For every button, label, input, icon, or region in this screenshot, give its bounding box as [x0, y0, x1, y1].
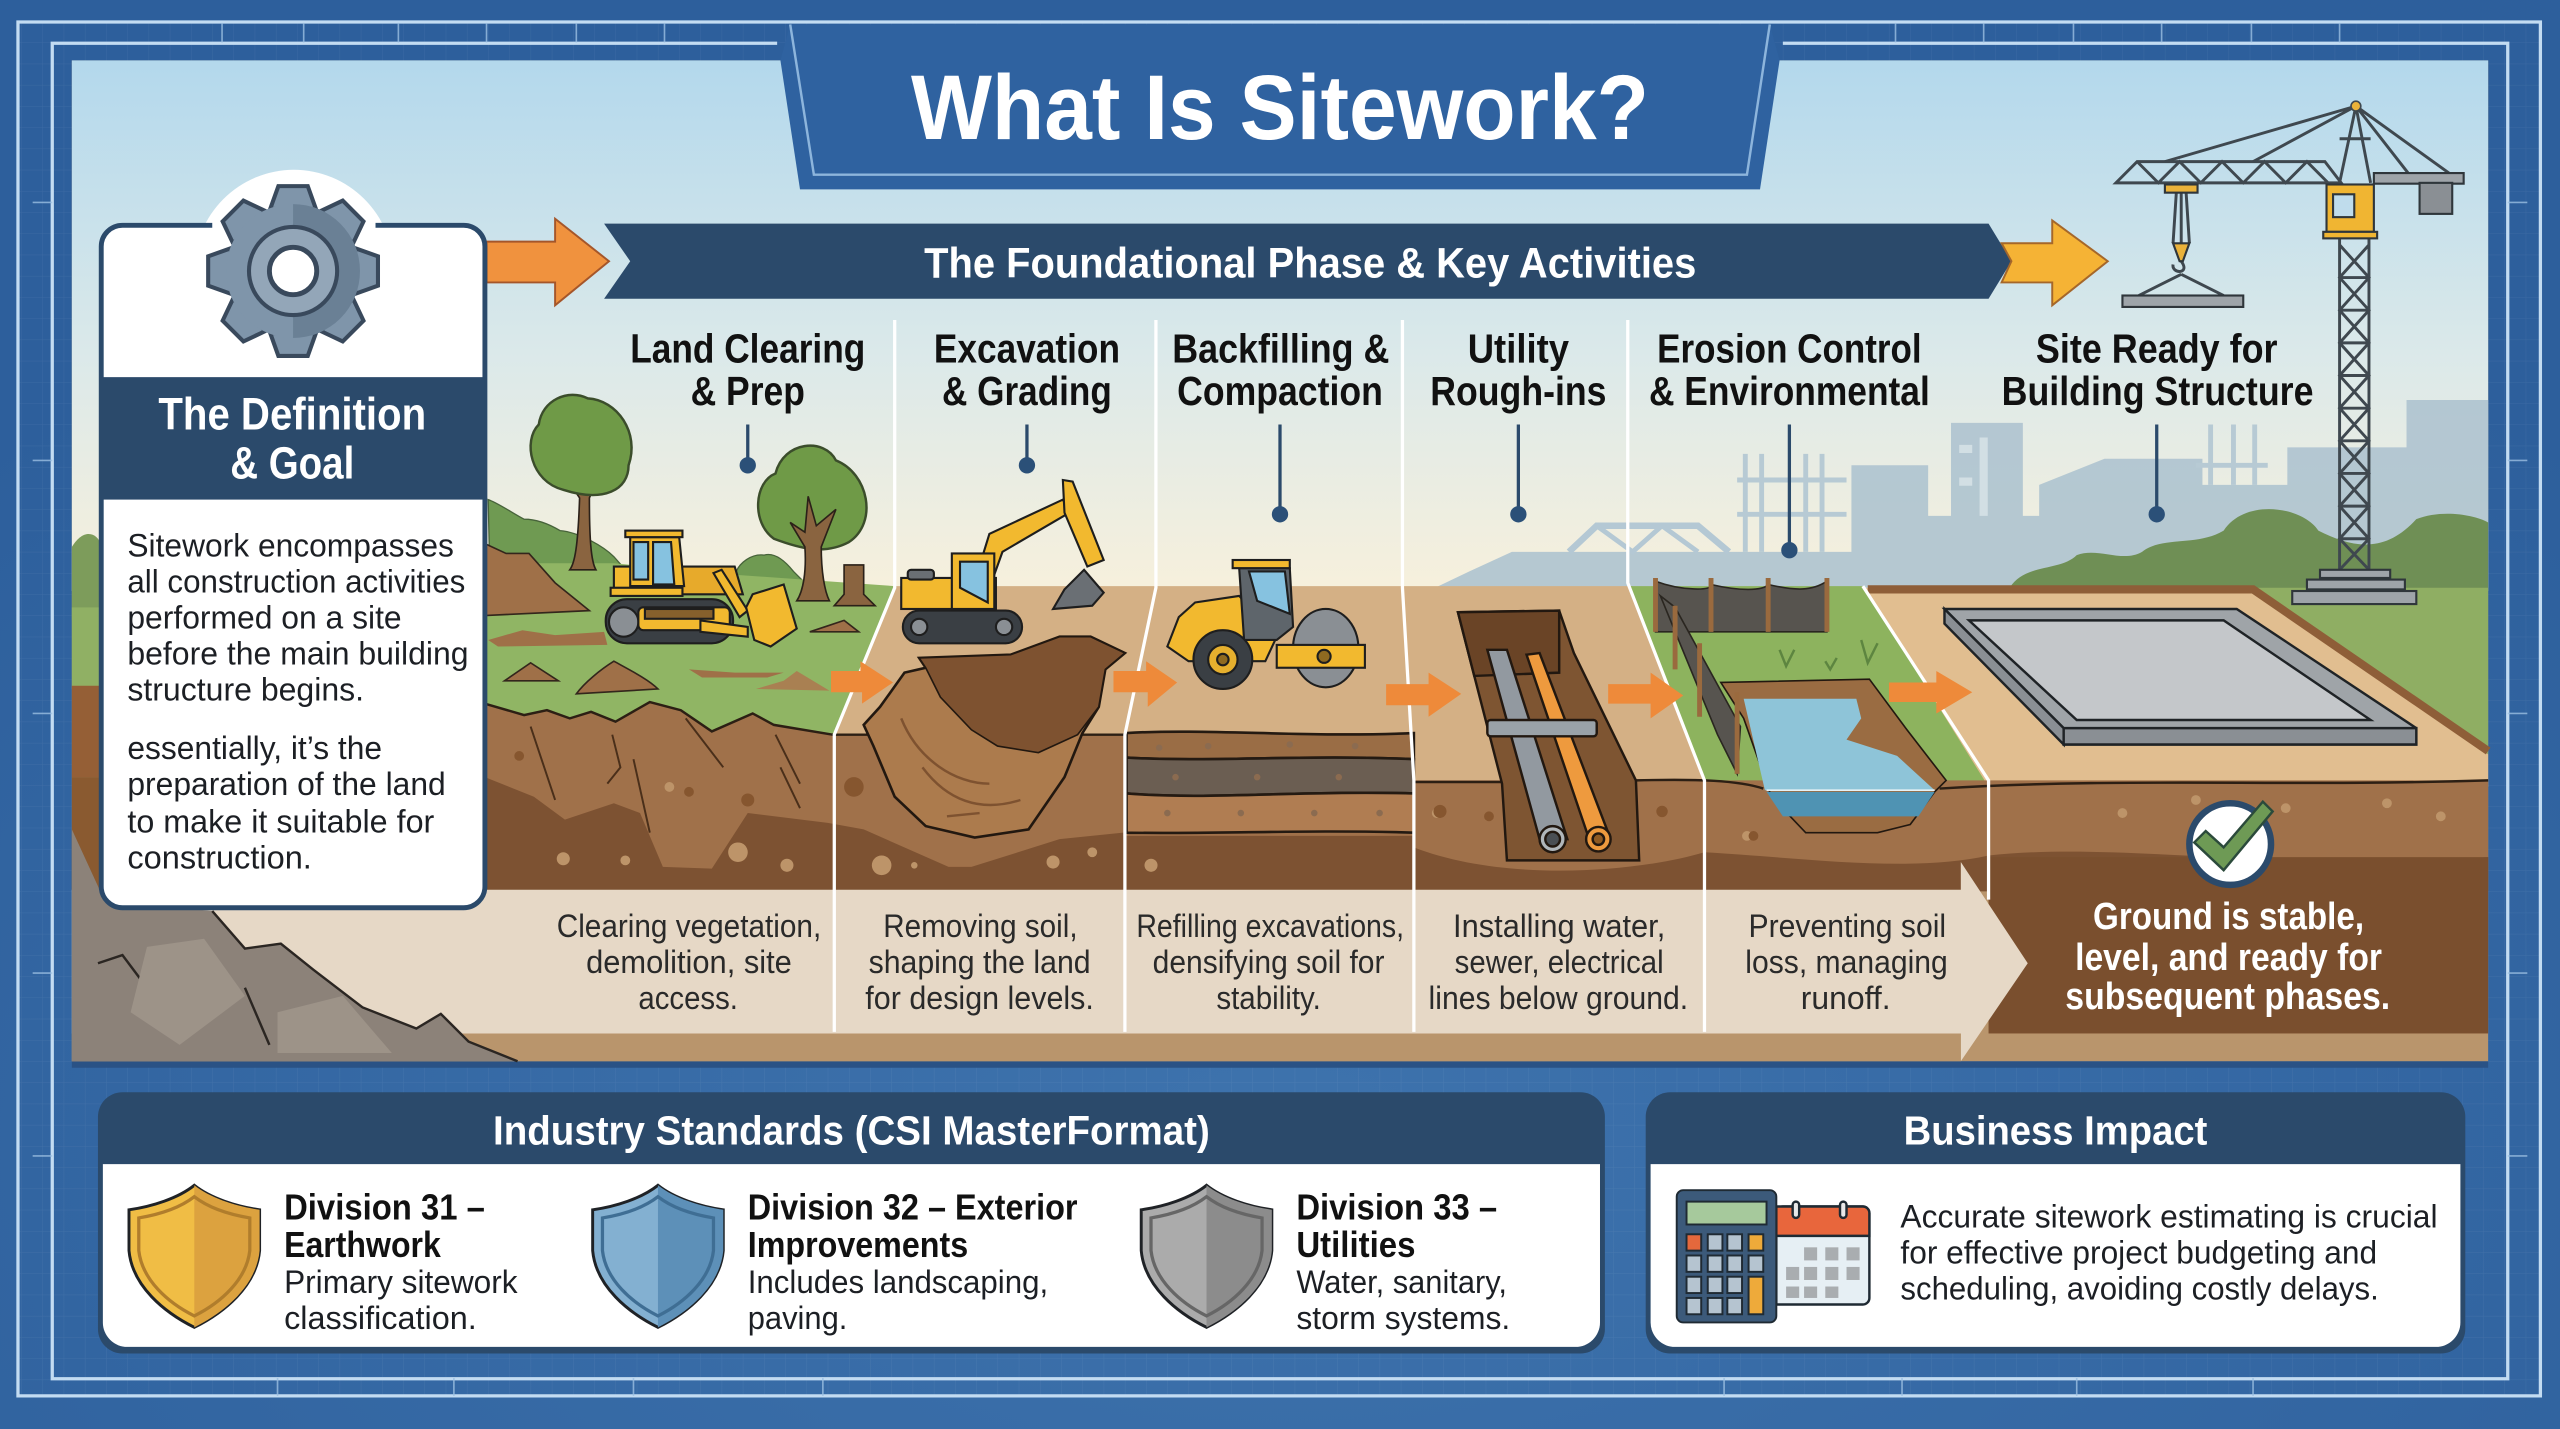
standards heading: Industry Standards (CSI MasterFormat) — [493, 1107, 1210, 1153]
site ready result: Ground is stable, — [2093, 895, 2364, 937]
description: utilities — [1429, 907, 1688, 1016]
backfill soil layers — [1127, 732, 1414, 833]
panel: business impact — [1646, 1092, 2465, 1353]
description: erosion: Preventing soil — [1749, 907, 1946, 944]
soil layers — [485, 702, 2488, 890]
tower crane — [2116, 101, 2464, 604]
description: land clearing: Clearing vegetation, — [557, 907, 821, 944]
scene base — [72, 60, 2488, 1061]
pond — [1721, 679, 1946, 833]
description: utilities: lines below ground. — [1429, 979, 1688, 1016]
definition text: Sitework encompasses — [127, 527, 454, 564]
step 3 heading: Compaction — [1177, 368, 1383, 414]
description: backfilling: stability. — [1216, 979, 1321, 1016]
step 1 heading: & Prep — [691, 368, 805, 414]
icon: check mark — [2189, 802, 2273, 885]
division 33: storm systems. — [1296, 1299, 1510, 1336]
icon: calculator — [1677, 1190, 1776, 1322]
tree: left — [531, 395, 632, 570]
land clearing ground — [485, 563, 895, 735]
definition text: performed on a site — [127, 599, 402, 636]
site ready result: level, and ready for — [2075, 936, 2382, 978]
description: excavation: for design levels. — [865, 979, 1094, 1016]
definition text — [127, 527, 469, 876]
business heading: Business Impact — [1904, 1107, 2208, 1153]
step 1 heading: Land Clearing — [630, 325, 865, 371]
column dividers — [834, 320, 1989, 1032]
step 5 heading — [1649, 325, 1930, 558]
arrow: phase banner to crane — [2002, 220, 2108, 305]
step 2 heading: Excavation — [934, 325, 1120, 371]
business text — [1900, 1198, 2438, 1307]
distant city skyline — [1435, 400, 2488, 588]
small orange arrows — [831, 661, 1972, 718]
description: backfilling: densifying soil for — [1153, 943, 1385, 980]
distant trees on the right — [2010, 509, 2488, 591]
rock pile — [72, 829, 518, 1061]
icon: blue shield — [593, 1185, 723, 1327]
left bushes — [488, 500, 627, 571]
main site scene — [72, 60, 2488, 1061]
step 5 heading: & Environmental — [1649, 368, 1930, 414]
division 31: Division 31 – — [284, 1187, 485, 1228]
step 1 heading — [630, 325, 865, 473]
step 4 heading — [1430, 325, 1607, 522]
description: land clearing: access. — [638, 979, 738, 1016]
definition text: to make it suitable for — [127, 803, 434, 840]
description: utilities: sewer, electrical — [1455, 943, 1664, 980]
description: excavation — [865, 907, 1094, 1016]
division 32 — [748, 1187, 1078, 1336]
step 3 heading — [1172, 325, 1389, 522]
description: land clearing: demolition, site — [586, 943, 792, 980]
step descriptions — [557, 907, 1948, 1016]
ground site columns — [834, 586, 1704, 780]
description: excavation: Removing soil, — [883, 907, 1078, 944]
soil cracks — [531, 718, 800, 833]
definition text: essentially, it’s the — [127, 729, 382, 766]
panel: industry standards — [98, 1092, 1605, 1353]
description: erosion: loss, managing — [1745, 943, 1948, 980]
description: utilities: Installing water, — [1453, 907, 1665, 944]
description: erosion: runoff. — [1801, 979, 1891, 1016]
division 32: Includes landscaping, — [748, 1263, 1048, 1300]
definition heading: The Definition — [158, 388, 426, 439]
step 4 heading: Rough-ins — [1430, 368, 1607, 414]
division 33: Utilities — [1296, 1224, 1416, 1265]
road roller — [1167, 560, 1365, 689]
icon: gold shield — [129, 1185, 260, 1327]
excavator — [901, 480, 1104, 643]
site ready ground — [1864, 588, 2488, 787]
icon: calendar — [1776, 1202, 1869, 1304]
division 31: Primary sitework — [284, 1263, 518, 1300]
bulldozer — [606, 531, 797, 647]
phase banner: The Foundational Phase & Key Activities — [924, 240, 1696, 287]
definition text: all construction activities — [127, 563, 465, 600]
dirt mounds — [485, 544, 859, 694]
description: excavation: shaping the land — [869, 943, 1091, 980]
definition heading: & Goal — [230, 437, 354, 488]
utility trench — [1458, 611, 1639, 860]
division 33: Division 33 – — [1296, 1187, 1497, 1228]
business text: scheduling, avoiding costly delays. — [1900, 1270, 2379, 1307]
step 6 heading — [2002, 325, 2313, 522]
sky — [72, 60, 2488, 591]
silt fence — [1656, 578, 1827, 774]
lower tan strip — [72, 1033, 1961, 1061]
site ready result — [2065, 802, 2390, 1017]
definition text: preparation of the land — [127, 765, 446, 802]
step 5 heading: Erosion Control — [1657, 325, 1922, 371]
description: land clearing — [557, 907, 821, 1016]
step 4 heading: Utility — [1468, 325, 1569, 371]
excavation pit — [864, 637, 1125, 838]
description: backfilling — [1136, 907, 1404, 1016]
title banner — [780, 24, 1780, 189]
step 3 heading: Backfilling & — [1172, 325, 1389, 371]
definition text: construction. — [127, 839, 312, 876]
definition text: before the main building — [127, 634, 469, 671]
division 33 — [1296, 1187, 1510, 1336]
step 6 heading: Building Structure — [2002, 368, 2313, 414]
division 31: classification. — [284, 1299, 477, 1336]
title: What Is Sitework? — [911, 57, 1649, 159]
description band arrow — [72, 862, 2028, 1061]
step headings and pins — [630, 325, 2313, 558]
soil stones — [557, 782, 2446, 875]
description: backfilling: Refilling excavations, — [1136, 907, 1404, 944]
step 2 heading: & Grading — [942, 368, 1112, 414]
panel: definition and goal — [101, 170, 485, 908]
site ready result: subsequent phases. — [2065, 975, 2390, 1017]
business text: for effective project budgeting and — [1900, 1234, 2377, 1271]
division 32: Division 32 – Exterior — [748, 1187, 1078, 1228]
icon: gear — [208, 186, 378, 356]
definition text: structure begins. — [127, 670, 364, 707]
icon: gray shield — [1141, 1185, 1272, 1327]
lower right brown block — [1989, 857, 2488, 1033]
division 32: paving. — [748, 1299, 847, 1336]
step 2 heading — [934, 325, 1120, 473]
step 6 heading: Site Ready for — [2036, 325, 2278, 371]
description: erosion — [1745, 907, 1948, 1016]
erosion column green — [1628, 586, 1989, 784]
tree: right — [758, 446, 875, 606]
definition heading — [101, 377, 485, 500]
grass tufts — [1780, 640, 1878, 669]
arrow: definition to phase banner — [487, 219, 609, 305]
phase banner — [604, 224, 2011, 299]
division 33: Water, sanitary, — [1296, 1263, 1507, 1300]
business text: Accurate sitework estimating is crucial — [1900, 1198, 2438, 1235]
division 31: Earthwork — [284, 1224, 441, 1265]
division 32: Improvements — [748, 1224, 968, 1265]
division 31 — [284, 1187, 518, 1336]
concrete slab — [1944, 609, 2416, 744]
